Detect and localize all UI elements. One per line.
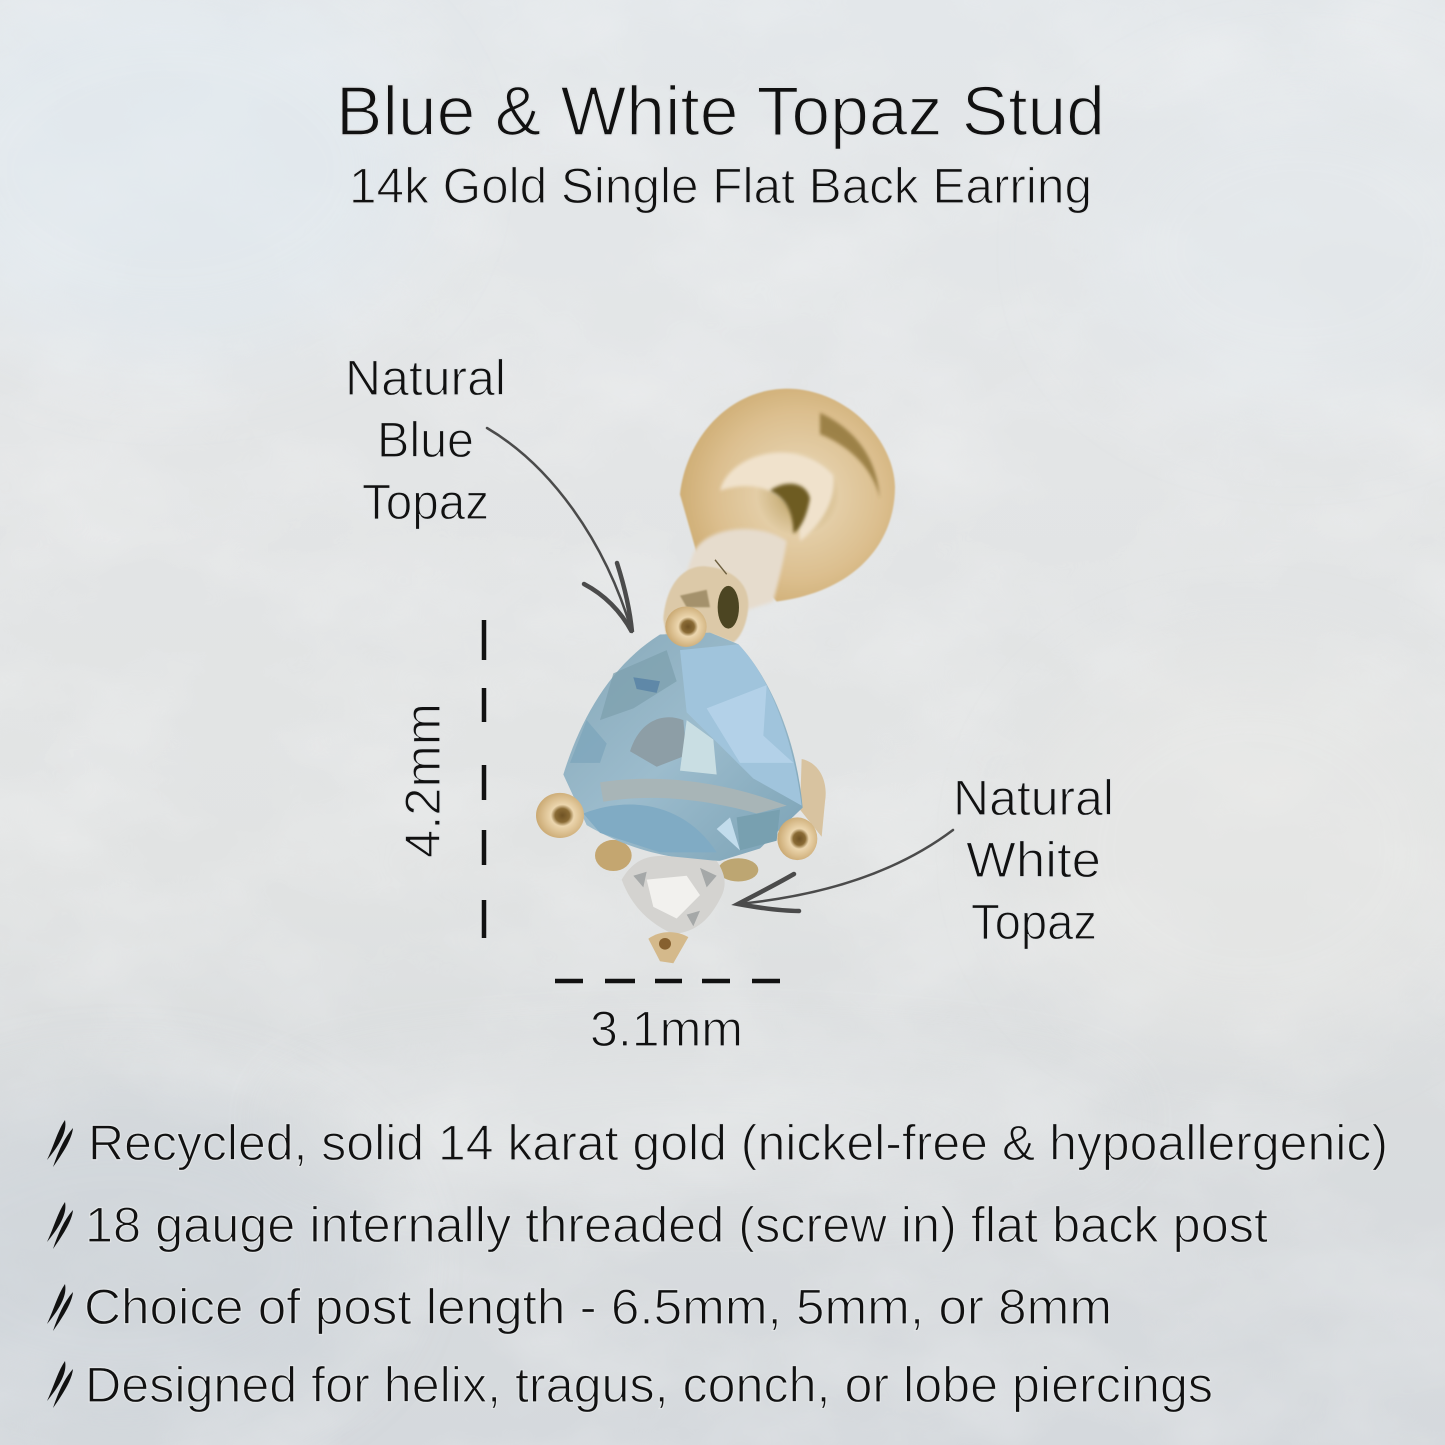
bullet row 1: Recycled, solid 14 karat gold (nickel-free & hypoallergenic) <box>88 1115 1388 1171</box>
width dimension line <box>555 979 780 983</box>
subtitle: 14k Gold Single Flat Back Earring <box>349 158 1092 214</box>
label: natural blue topaz: Natural <box>345 350 506 406</box>
label: natural white topaz: Natural <box>953 770 1114 826</box>
height dimension label: 4.2mm <box>395 703 451 858</box>
icon: blue topaz gem <box>563 633 803 861</box>
label: natural white topaz <box>953 770 1114 950</box>
icon: front prongs <box>536 607 817 963</box>
label: natural white topaz: Topaz <box>971 894 1097 950</box>
label: natural blue topaz <box>345 350 506 530</box>
icon: flat back disc <box>680 389 895 611</box>
label: natural white topaz: White <box>966 832 1101 888</box>
icon: back prongs <box>595 759 826 882</box>
label: natural blue topaz: Blue <box>377 412 474 468</box>
icon: top bezel <box>663 560 748 642</box>
arrow: to white topaz <box>738 830 953 911</box>
feature list <box>47 1115 1388 1413</box>
arrow: to blue topaz <box>487 428 632 632</box>
bullet row 3: Choice of post length - 6.5mm, 5mm, or 8mm <box>84 1279 1112 1335</box>
width dimension label: 3.1mm <box>590 1001 743 1057</box>
label: natural blue topaz: Topaz <box>362 474 489 530</box>
bullet row 4: Designed for helix, tragus, conch, or lobe piercings <box>85 1357 1213 1413</box>
icon: white topaz gem <box>622 856 725 934</box>
height dimension line <box>482 620 486 938</box>
title: Blue & White Topaz Stud <box>336 72 1105 150</box>
earring photo illustration <box>536 389 895 963</box>
bullet row 2: 18 gauge internally threaded (screw in) flat back post <box>85 1197 1268 1253</box>
